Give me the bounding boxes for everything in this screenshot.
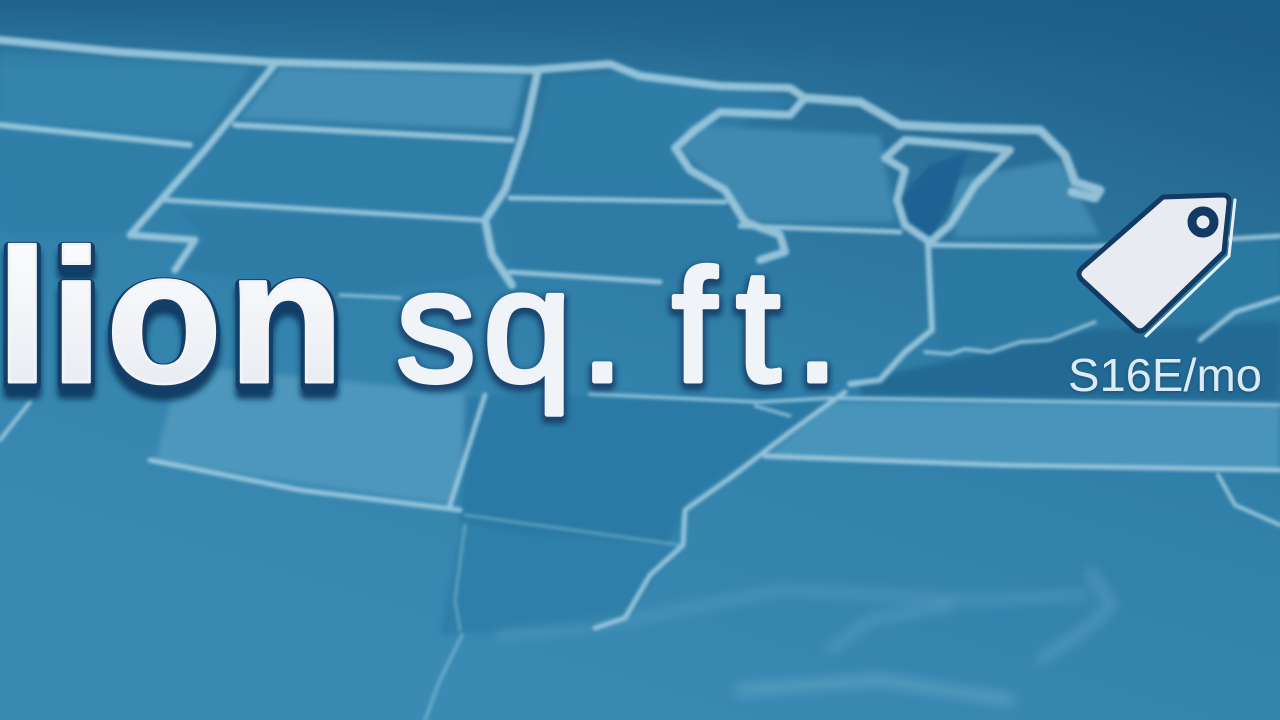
- headline: lion: [0, 211, 344, 434]
- icon: price tag: [1079, 195, 1235, 336]
- top darkening: [0, 0, 1280, 70]
- tag hole: [1192, 211, 1214, 233]
- tag highlight edge: [1146, 200, 1235, 336]
- headline text: lion: lion: [0, 211, 344, 423]
- headline text: sq. ft.: sq. ft.: [396, 236, 839, 415]
- price label shadow: S16E/mo: [1068, 350, 1262, 402]
- headline shadow: lion: lion: [0, 222, 344, 434]
- map: faint lower borders: [425, 515, 680, 720]
- price label text: S16E/mo: [1068, 349, 1262, 401]
- map: faded southern coast: [500, 572, 1112, 700]
- headline shadow: sq. ft.: sq. ft.: [396, 240, 839, 419]
- headline outline: lion: lion: [0, 214, 344, 426]
- headline: sq. ft.: [396, 236, 839, 419]
- tag body: [1079, 195, 1229, 331]
- map: lake: [898, 152, 968, 240]
- price label: [1068, 349, 1262, 402]
